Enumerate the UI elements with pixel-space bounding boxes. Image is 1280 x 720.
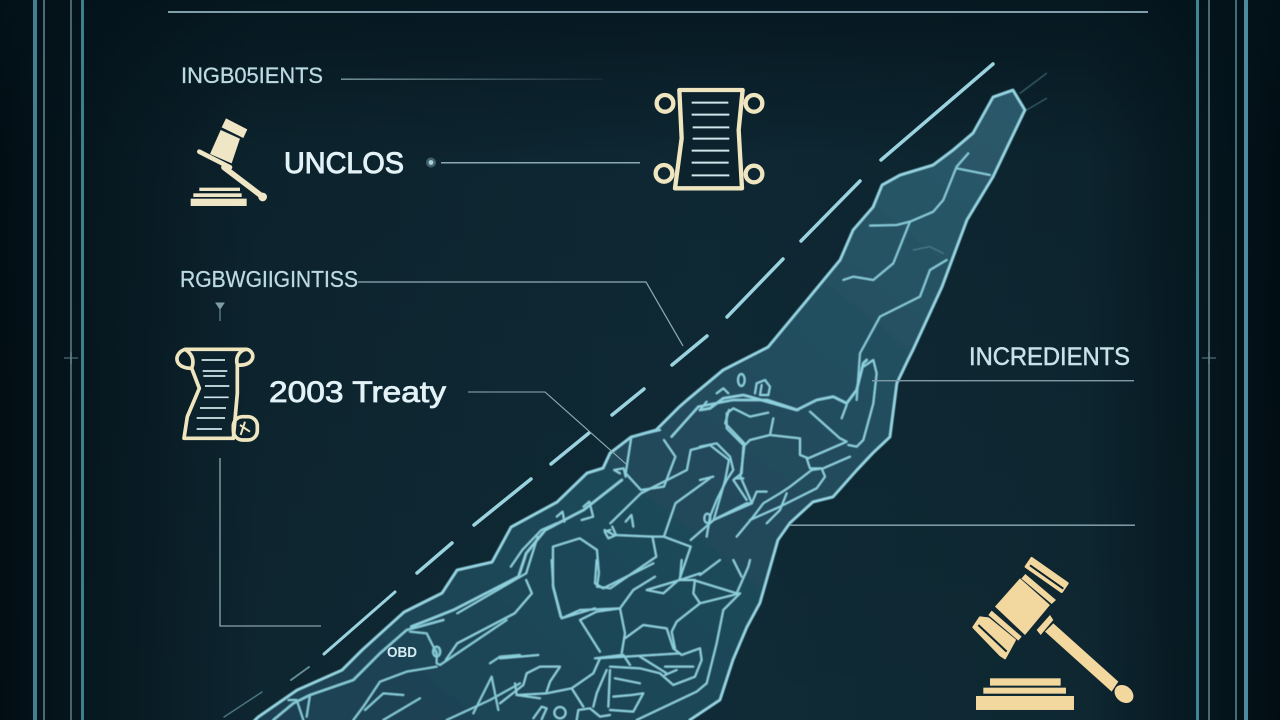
map: place label: OBD [387,644,417,661]
map: inner channels north [843,73,1047,400]
top rule [168,11,1148,13]
icon: large gavel [973,558,1137,710]
callout line: lower right [790,524,1135,526]
map: coastal channels southwest [273,620,520,720]
map: landmass fill and outer coast [250,90,1025,720]
callout line: second heading to boundary [358,282,683,346]
callout line: right heading [872,380,1134,381]
icon: scroll top [656,90,762,188]
map: inner channels centre [700,360,877,537]
label: UNCLOS: UNCLOS [284,147,404,180]
icon: small gavel [191,118,267,206]
heading: right: INCREDIENTS [969,343,1130,371]
heading: middle left: RGBWGIIGINTISS [180,266,358,292]
callout line: left elbow [220,458,321,626]
dashed boundary line [224,64,993,717]
label: 2003 Treaty: 2003 Treaty [269,376,446,409]
callout line: ingredients top [341,78,603,80]
callout line: UNCLOS to scroll [426,158,640,168]
heading: top left: INGB05IENTS [181,63,323,88]
map: main river and ridges [411,400,798,660]
small pin marker [216,303,224,321]
map: strait outline [250,73,1047,720]
callout line: 2003 Treaty to map [468,392,626,464]
map: inner channels south [500,560,750,720]
icon: scroll left [177,349,257,440]
